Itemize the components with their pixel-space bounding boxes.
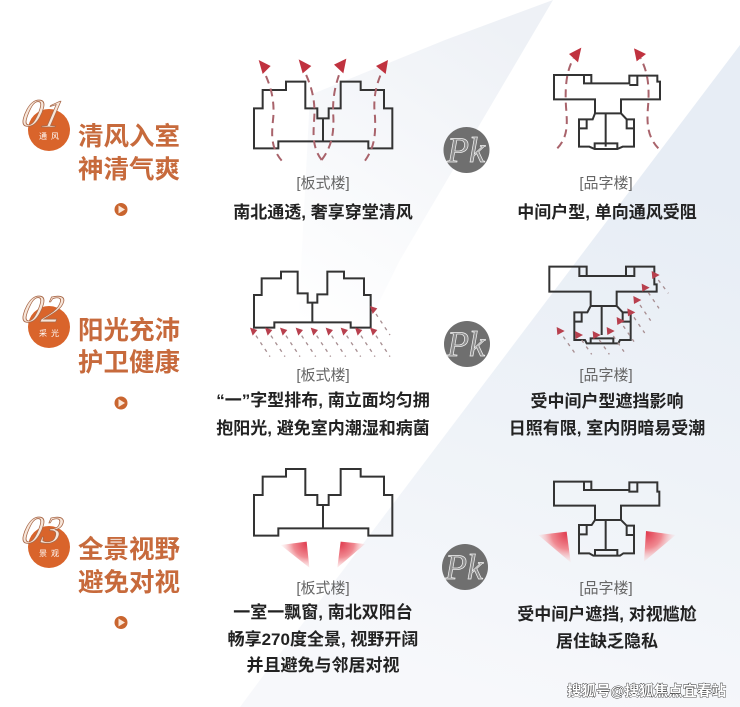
badge 01: 通风 [39, 131, 63, 141]
badge 03: 0 [18, 509, 48, 552]
floor plan [549, 267, 657, 343]
row 3 heading: panoramic view [18, 509, 180, 629]
title 全景视野 避免对视: 全景视野 [78, 536, 180, 564]
row 1 left: slab building ventilation plan [254, 59, 392, 161]
row 1 right caption: [品字楼] [579, 175, 633, 192]
row 1 left caption [233, 174, 413, 222]
watermark: 搜狐号@搜狐焦点宜春站 [567, 682, 727, 700]
view cones [538, 531, 676, 562]
row 2 left caption: 抱阳光, 避免室内潮湿和病菌 [216, 418, 430, 438]
row 1 versus badge: Pk [446, 130, 486, 170]
badge 01: 0 [18, 92, 48, 135]
row 3 right caption: [品字楼] [579, 580, 633, 597]
row 1 right caption [517, 175, 697, 222]
row 2 right: pin-shaped building sunlight plan [549, 267, 668, 354]
row 2 right caption: 日照有限, 室内阴暗易受潮 [509, 418, 705, 438]
badge 03 [18, 509, 70, 568]
floor plan [554, 75, 660, 149]
row 1 heading: fresh air [18, 92, 180, 216]
floor plan [254, 82, 392, 148]
title 阳光充沛 护卫健康 [78, 317, 180, 377]
row 1 right caption: 中间户型, 单向通风受阻 [517, 202, 697, 222]
badge 02: 采光 [39, 328, 63, 338]
title 清风入室 神清气爽: 清风入室 [78, 122, 180, 151]
row 3 right: pin-shaped building view plan [538, 482, 676, 562]
floor plan [254, 272, 371, 328]
row 2 heading: sunlight [18, 288, 180, 410]
icon: play button [114, 396, 128, 410]
row 3 left caption: 畅享270度全景, 视野开阔 [228, 629, 418, 649]
title 全景视野 避免对视 [78, 536, 180, 597]
badge 02: 2 [38, 288, 68, 331]
title 全景视野 避免对视: 避免对视 [78, 569, 180, 597]
title 阳光充沛 护卫健康: 护卫健康 [78, 349, 180, 377]
title 清风入室 神清气爽: 神清气爽 [78, 156, 180, 184]
row 3 left: slab building view plan [254, 469, 392, 568]
row 3 left caption [228, 579, 418, 675]
row 2 left: slab building sunlight plan [250, 272, 390, 357]
row 2 left caption: “一”字型排布, 南立面均匀拥 [216, 390, 430, 410]
badge 03: 3 [37, 509, 68, 552]
row 2 right caption: 受中间户型遮挡影响 [530, 391, 684, 411]
row 2 left caption: [板式楼] [296, 366, 350, 384]
row 1 left caption: 南北通透, 奢享穿堂清风 [233, 202, 413, 222]
row 2 left caption [216, 366, 430, 438]
badge 02 [18, 288, 70, 348]
badge 01: 1 [38, 93, 68, 136]
row 2 right caption [509, 367, 705, 438]
row 1 right: pin-shaped building ventilation plan [554, 48, 660, 149]
row 2 right caption: [品字楼] [579, 367, 633, 384]
badge 01 [18, 92, 70, 151]
row 3 right caption: 居住缺乏隐私 [556, 631, 658, 651]
sunlight arrows [250, 306, 390, 357]
icon: play button [114, 616, 128, 629]
row 3 left caption: 并且避免与邻居对视 [246, 655, 400, 675]
row 1 left caption: [板式楼] [296, 174, 350, 192]
row 3 left caption: [板式楼] [296, 579, 350, 597]
airflow arrows [259, 59, 388, 161]
badge 03: 景观 [39, 549, 63, 558]
row 3 right caption [517, 580, 697, 651]
floor plan [554, 482, 659, 556]
view cones [281, 542, 365, 568]
sunlight arrows [557, 271, 668, 354]
airflow arrows [557, 48, 658, 148]
title 阳光充沛 护卫健康: 阳光充沛 [78, 317, 180, 345]
floor plan [254, 469, 392, 536]
badge 02: 0 [18, 288, 48, 331]
row 2 versus badge: Pk [446, 324, 486, 364]
title 清风入室 神清气爽 [78, 122, 180, 184]
icon: play button [114, 203, 128, 216]
row 3 left caption: 一室一飘窗, 南北双阳台 [233, 602, 413, 622]
row 3 versus badge: Pk [444, 547, 484, 587]
row 3 right caption: 受中间户遮挡, 对视尴尬 [517, 604, 697, 624]
